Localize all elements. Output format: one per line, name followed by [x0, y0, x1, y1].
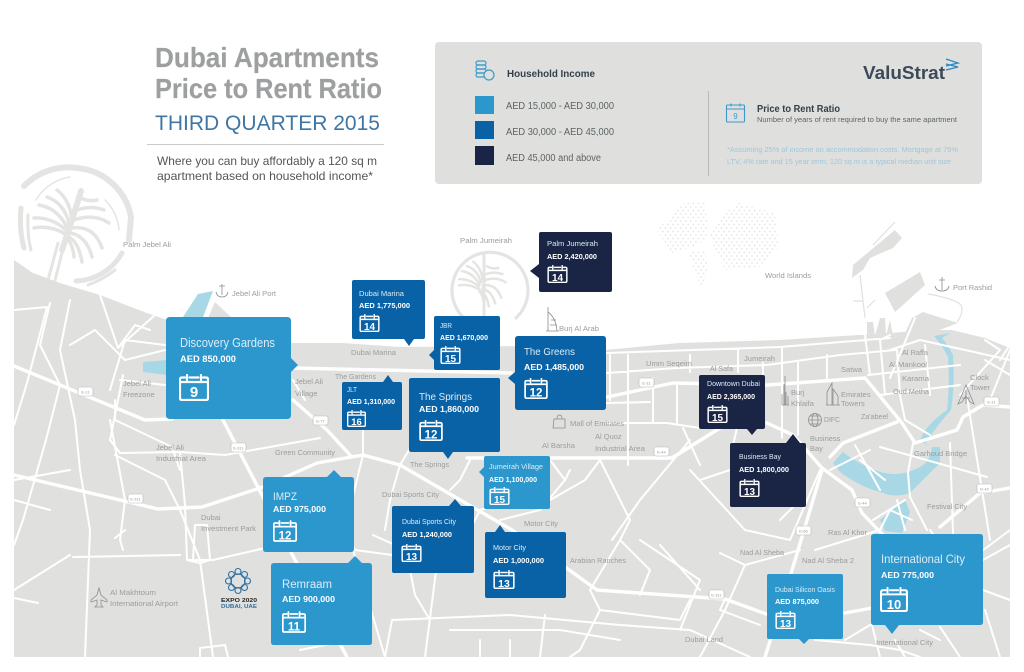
footnote — [727, 147, 958, 166]
callout: IMPZ: AED 975,000 — [273, 504, 326, 514]
highway badges: E-11 — [81, 390, 90, 394]
callout: IMPZ: IMPZ — [273, 491, 297, 503]
icon: clock tower — [958, 385, 974, 404]
callout: Downtown Dubai: AED 2,365,000 — [707, 392, 755, 401]
callout: The Greens: AED 1,485,000 — [524, 362, 584, 372]
callout: Business Bay — [730, 434, 806, 507]
icon: mall of emirates — [553, 415, 565, 428]
callout: Jumeirah Village: AED 1,100,000 — [489, 475, 537, 484]
callout: The Greens: The Greens — [524, 346, 575, 358]
map labels: Ras Al Khor — [828, 528, 867, 537]
map labels: Burj — [791, 388, 805, 397]
map labels: Za'abeel — [861, 412, 888, 421]
map labels — [110, 236, 992, 647]
map labels: World Islands — [765, 271, 811, 280]
callout: International City: International City — [881, 552, 965, 566]
map labels: International Airport — [110, 599, 179, 608]
map labels: Nad Al Sheba — [740, 548, 785, 557]
map labels: Jumeirah — [744, 354, 775, 363]
footnote: *Assuming 25% of income on accommodation costs. Mortgage at 75% — [727, 147, 958, 154]
callout: Dubai Silicon Oasis: Dubai Silicon Oasis — [775, 587, 835, 594]
calendar: 15 years: 15 — [494, 495, 505, 506]
callout: IMPZ — [263, 470, 354, 552]
palm jumeirah — [452, 252, 528, 320]
map labels: Palm Jumeirah — [460, 236, 512, 245]
icon: airplane — [91, 588, 107, 607]
logo: expo 2020 — [221, 568, 257, 610]
callout: Dubai Sports City — [392, 499, 474, 573]
callout: Discovery Gardens: Discovery Gardens — [180, 336, 275, 350]
callout: Downtown Dubai — [699, 375, 765, 435]
map labels: The Springs — [410, 460, 449, 469]
map labels: Karama — [902, 374, 930, 383]
highway badges: E-11 — [642, 380, 651, 386]
callout: The Springs: AED 1,860,000 — [419, 404, 479, 414]
legend heading: Household Income — [507, 69, 595, 80]
map labels: Freezone — [123, 390, 155, 399]
callout: JBR: AED 1,670,000 — [440, 333, 488, 342]
callout: JBR — [429, 316, 500, 370]
legend item: light blue: AED 15,000 - AED 30,000 — [506, 101, 614, 112]
highway badges: E-44 — [858, 500, 867, 506]
map labels: Festival City — [927, 502, 967, 511]
map labels: Industrial Area — [595, 444, 646, 453]
highway badges: E-66 — [799, 528, 808, 534]
callout: Palm Jumeirah: Palm Jumeirah — [547, 239, 598, 248]
legend item: light blue — [475, 96, 614, 114]
callout: Palm Jumeirah — [530, 232, 612, 292]
map labels: Satwa — [841, 365, 863, 374]
calendar: 13 years: 13 — [498, 578, 510, 590]
map labels: Khlaifa — [791, 399, 815, 408]
highway badges: E-311 — [130, 496, 141, 502]
panel: legend — [435, 42, 982, 184]
map labels: Dubai Marina — [351, 348, 397, 357]
title: Price to Rent Ratio — [155, 73, 382, 104]
calendar: 15 years: 15 — [712, 413, 723, 424]
calendar: 14 years: 14 — [364, 322, 375, 333]
port rashid and harbour areas — [208, 222, 962, 338]
map labels: Bay — [810, 444, 823, 453]
callout: Motor City — [485, 525, 566, 598]
highway badges — [78, 378, 999, 599]
map labels: Village — [295, 389, 317, 398]
highway badges: E-44 — [657, 450, 666, 454]
map labels: Arabian Ranches — [570, 556, 626, 565]
legend item: navy: AED 45,000 and above — [506, 153, 601, 164]
callout: Remraam: AED 900,000 — [282, 594, 335, 604]
callout: JLT: JLT — [347, 387, 358, 394]
logo: expo 2020: DUBAI, UAE — [221, 604, 257, 610]
callout: Business Bay: Business Bay — [739, 452, 781, 461]
map labels: Port Rashid — [953, 283, 992, 292]
icon: jebel ali anchor — [216, 284, 228, 297]
logo: ValuStrat: ValuStrat — [863, 63, 945, 83]
callout: Dubai Silicon Oasis — [767, 574, 843, 644]
map labels: Dubai — [201, 513, 221, 522]
map labels: Al Safa — [710, 364, 734, 373]
map labels: DIFC — [824, 415, 841, 424]
callout: Dubai Sports City: AED 1,240,000 — [402, 530, 452, 539]
map labels: Green Community — [275, 448, 335, 457]
calendar: 15 years: 15 — [445, 354, 456, 365]
callout: Remraam: Remraam — [282, 579, 332, 591]
calendar: 12 years: 12 — [279, 530, 291, 542]
callout: JLT — [342, 375, 402, 430]
calendar: 12 years: 12 — [425, 430, 437, 442]
callout: Dubai Marina — [352, 280, 425, 346]
callout: Dubai Marina: AED 1,775,000 — [359, 301, 410, 310]
map labels: Jebel Ali — [295, 377, 323, 386]
map labels: Umm Seqeim — [646, 359, 692, 368]
callout: Palm Jumeirah: AED 2,420,000 — [547, 252, 597, 261]
map labels: Jebel Ali Port — [232, 289, 277, 298]
description text: Where you can buy affordably a 120 sq m — [157, 154, 377, 168]
callout: Jumeirah Village: Jumeirah Village — [489, 464, 543, 471]
callout: Discovery Gardens: AED 850,000 — [180, 354, 236, 364]
icon: calendar legend: 9 — [733, 112, 738, 121]
roads — [14, 295, 1010, 657]
callout: International City — [871, 534, 983, 634]
map labels: Industrial Area — [156, 454, 207, 463]
calendar: 11 years: 11 — [288, 622, 301, 634]
icon: difc globe — [808, 414, 822, 426]
world islands — [658, 202, 778, 285]
map labels: Towers — [841, 399, 865, 408]
legend item: navy — [475, 146, 601, 165]
landmark icons — [91, 277, 974, 607]
map labels: Business — [810, 434, 841, 443]
highway badges: E-11 — [987, 400, 996, 404]
callout: The Springs — [409, 378, 500, 459]
map labels: Al Mankool — [889, 360, 927, 369]
calendar: 10 years: 10 — [887, 597, 901, 612]
map labels: Al Makhtoum — [110, 588, 156, 597]
calendar: 12 years: 12 — [530, 388, 542, 400]
logo: ValuStrat — [863, 59, 958, 83]
map labels: Nad Al Sheba 2 — [802, 556, 854, 565]
calendar: 16 years: 16 — [351, 417, 362, 428]
callout: The Greens — [508, 336, 606, 410]
callout: Discovery Gardens — [166, 317, 298, 419]
map labels: Motor City — [524, 519, 558, 528]
description text — [157, 154, 377, 183]
callout: Jumeirah Village — [479, 456, 550, 509]
map labels: Dubai Sports City — [382, 490, 439, 499]
description text: apartment based on household income* — [157, 169, 373, 183]
title — [155, 42, 382, 104]
legend item: mid blue: AED 30,000 - AED 45,000 — [506, 127, 614, 138]
map background with roads — [14, 222, 1010, 657]
callout: Dubai Marina: Dubai Marina — [359, 289, 405, 298]
map labels: Dubai Land — [685, 635, 723, 644]
title: Dubai Apartments — [155, 42, 379, 73]
highway badges: E-311 — [233, 446, 244, 450]
map labels: Oud Metha — [893, 387, 930, 396]
callout: Downtown Dubai: Downtown Dubai — [707, 379, 760, 388]
water — [143, 291, 954, 533]
icon: burj al arab — [546, 307, 559, 331]
callout: JLT: AED 1,310,000 — [347, 397, 395, 406]
subtitle: third quarter 2015: THIRD QUARTER 2015 — [155, 112, 380, 135]
calendar: 13 years: 13 — [780, 619, 791, 630]
map labels: The Gardens — [335, 372, 376, 381]
map labels: Palm Jebel Ali — [123, 240, 171, 249]
price to rent ratio heading: Price to Rent Ratio — [757, 104, 840, 115]
logo: expo 2020: EXPO 2020 — [221, 598, 257, 604]
callout: Dubai Sports City: Dubai Sports City — [402, 517, 456, 526]
map labels: Al Quoz — [595, 432, 622, 441]
highway badges: E-311 — [711, 592, 722, 598]
map labels: International City — [876, 638, 933, 647]
calendar: 14 years: 14 — [552, 273, 563, 284]
map labels: Clock — [970, 373, 989, 382]
highway badges: E-77 — [316, 418, 325, 424]
palm jebel ali — [20, 167, 131, 300]
icon: coins — [476, 61, 494, 80]
calendar: 9 years: 9 — [190, 384, 198, 401]
map labels: Emirates — [841, 390, 871, 399]
map labels: Garhoud Bridge — [914, 449, 967, 458]
price to rent ratio description: Number of years of rent required to buy the same apartment — [757, 115, 958, 124]
map labels: Al Barsha — [542, 441, 576, 450]
calendar: 13 years: 13 — [406, 552, 417, 563]
map labels: Jebel Ali — [123, 379, 151, 388]
map labels: Tower — [970, 383, 991, 392]
footnote: LTV, 4% rate and 15 year term; 120 sq m is a typical median unit size — [727, 159, 951, 166]
icon: emirates towers — [826, 383, 840, 405]
callout: Motor City: Motor City — [493, 543, 526, 552]
callout: JBR: JBR — [440, 321, 452, 330]
icon: port rashid anchor — [935, 277, 949, 291]
callout: Dubai Silicon Oasis: AED 875,000 — [775, 597, 819, 606]
calendar: 13 years: 13 — [744, 487, 755, 498]
map labels: Mall of Emirates — [570, 419, 624, 428]
callout: Motor City: AED 1,000,000 — [493, 556, 544, 565]
map labels: Al Raffa — [902, 348, 929, 357]
highway badges: D-42 — [980, 486, 990, 492]
legend item: mid blue — [475, 121, 614, 139]
map labels: Burj Al Arab — [559, 324, 599, 333]
callout: The Springs: The Springs — [419, 391, 472, 403]
callout: International City: AED 775,000 — [881, 570, 934, 580]
callout: Remraam — [271, 556, 372, 645]
callout: Business Bay: AED 1,800,000 — [739, 465, 789, 474]
map labels: Jebel Ali — [156, 443, 184, 452]
icon: burj khalifa — [782, 376, 789, 405]
icon: calendar legend — [726, 104, 744, 122]
map labels: Investment Park — [201, 524, 256, 533]
